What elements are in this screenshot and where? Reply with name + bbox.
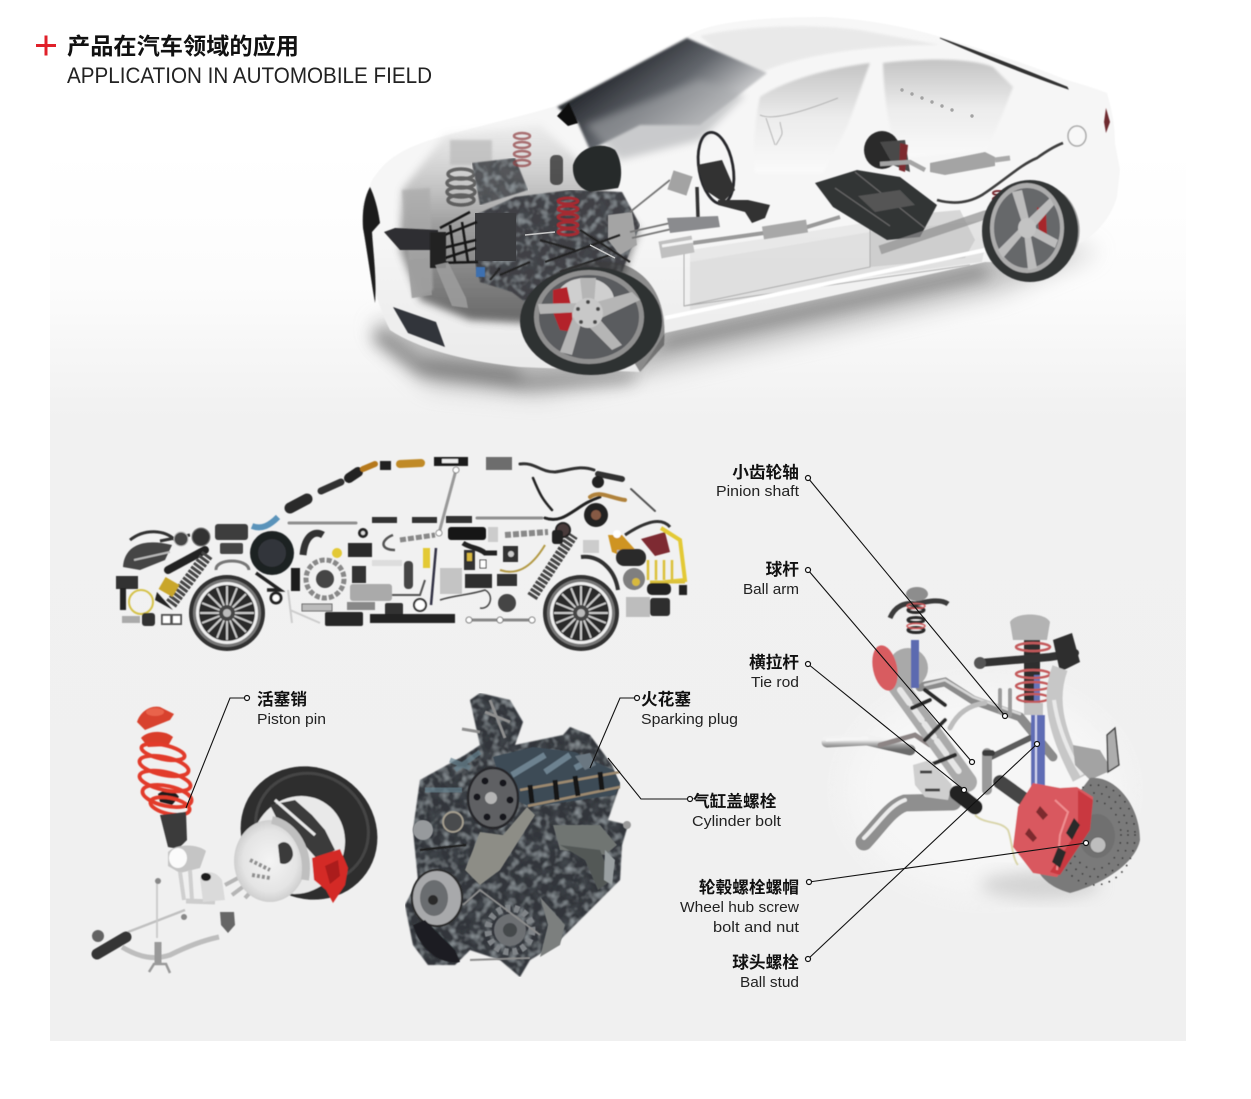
callout: piston pin (186, 689, 326, 808)
car made of parts (116, 457, 687, 651)
dark suspension parts behind rim (270, 800, 335, 860)
windshield (557, 38, 767, 150)
knuckle (1055, 668, 1080, 778)
leader end dot (1084, 840, 1088, 846)
tyre (520, 267, 662, 375)
roof dark strip (940, 38, 1068, 89)
blue filter (476, 267, 485, 277)
callout: piston pin: Piston pin (257, 711, 326, 728)
label: 轮毂螺栓螺帽 (699, 877, 799, 897)
subframe tubes (827, 680, 1053, 842)
leader end dot (970, 760, 974, 764)
rear fuel pipe (937, 143, 1063, 202)
carburettor highlights (462, 700, 510, 738)
caliper (1037, 207, 1047, 237)
wheel and brake (214, 740, 404, 926)
brake lines to steering (630, 180, 676, 238)
label: 小齿轮轴 (732, 463, 799, 482)
rim interior (233, 779, 363, 911)
brake disc (234, 820, 306, 902)
callout: wheel hub screw bolt and nut (680, 840, 1088, 936)
steering boot (957, 793, 975, 807)
gearbox housing (913, 760, 952, 800)
lower control arm (92, 866, 262, 973)
blue highlights (425, 752, 480, 790)
radiator crossmember (384, 228, 438, 250)
leader dot (244, 696, 250, 700)
leader start dot (806, 880, 812, 884)
tyre (982, 180, 1078, 282)
hub (573, 298, 603, 328)
pale lower strut (408, 258, 468, 308)
strut and spring (137, 707, 206, 873)
callout: tie rod: Tie rod (751, 674, 799, 691)
icon: red plus (36, 36, 56, 56)
callout: pinion shaft (716, 463, 1008, 718)
oil pan (413, 920, 460, 962)
leader line (808, 744, 1037, 959)
faint red strut (514, 133, 530, 166)
upper engine box (472, 158, 528, 205)
selector box (667, 170, 693, 196)
intake coils (447, 169, 475, 205)
muffler (930, 152, 995, 175)
fog lamp (393, 307, 445, 347)
wheels (189, 575, 619, 651)
label: 气缸盖螺栓 (693, 791, 777, 811)
drilled brake disc (1035, 778, 1140, 893)
leader end dot (1034, 742, 1040, 746)
callout: wheel hub screw bolt and nut: Wheel hub screw (680, 899, 799, 916)
strut tower (608, 212, 637, 255)
label: 活塞销 (257, 689, 307, 709)
crank pulley (412, 870, 462, 926)
callout: cylinder bolt: Cylinder bolt (692, 813, 782, 830)
contact shadow under sill and bumper (372, 266, 990, 388)
callout: ball stud (732, 742, 1040, 991)
rear parts (532, 503, 687, 617)
caliper (312, 849, 348, 903)
roof and window parts (289, 457, 655, 536)
red spring (558, 198, 578, 235)
title Chinese: 产品在汽车领域的应用 (67, 33, 299, 59)
callout: sparking plug: Sparking plug (641, 711, 738, 728)
leader line (808, 664, 964, 790)
timing pulley (468, 768, 518, 828)
exhaust pipe (693, 217, 840, 243)
middle parts (288, 527, 548, 626)
leader line (590, 698, 634, 768)
label: 火花塞 (641, 689, 691, 709)
grille (363, 187, 380, 303)
radiating frame struts (432, 212, 478, 263)
title English: APPLICATION IN AUTOMOBILE FIELD (67, 63, 432, 88)
door panel and sill (665, 210, 990, 318)
background panel (50, 150, 1186, 1041)
label: 球头螺栓 (732, 952, 799, 972)
rear brake disc (864, 131, 900, 169)
spokes (538, 278, 640, 355)
filler cap (1068, 126, 1086, 146)
tyre (214, 740, 404, 926)
cabin and underbody parts (660, 108, 1110, 250)
small dark cylinder (550, 155, 563, 185)
leader end dot (1002, 714, 1008, 718)
ground shadow (980, 871, 1100, 899)
engine block and accessories mass (475, 190, 640, 302)
timing belt cover (465, 807, 535, 885)
leader dot (688, 796, 692, 802)
brake caliper (1013, 783, 1093, 877)
hood corner (557, 103, 578, 126)
leader line (809, 843, 1086, 882)
hub (1018, 218, 1036, 238)
pipes bundle (490, 230, 630, 280)
idler (413, 820, 433, 840)
car body (362, 17, 1120, 372)
shifter plate (667, 216, 720, 233)
pale canister (450, 140, 492, 165)
dark lower frame (430, 232, 446, 268)
bay haze (400, 125, 640, 325)
right strut (974, 614, 1119, 787)
pale backdrop (845, 685, 1125, 895)
fuel tank (815, 170, 937, 240)
broad ground shadow (372, 240, 1100, 395)
front wheel (520, 262, 665, 375)
callout: sparking plug (590, 689, 738, 768)
transparent cutaway car (362, 17, 1120, 395)
label: 球杆 (766, 560, 799, 579)
pedal bracket (718, 200, 770, 223)
heading (36, 33, 432, 88)
muffler pipe (880, 162, 925, 170)
leader dot (634, 696, 640, 700)
callout: wheel hub screw bolt and nut: bolt and nut (713, 919, 800, 936)
leader end dot (962, 788, 966, 792)
outer bracket (1073, 745, 1112, 780)
front suspension with wheel (92, 707, 404, 973)
tensioner (443, 812, 463, 832)
rear side window (883, 60, 1013, 158)
callout: ball arm: Ball arm (743, 581, 799, 598)
leader line (608, 758, 687, 799)
main block (475, 213, 516, 261)
spokes (998, 190, 1058, 270)
left strut (868, 587, 948, 693)
brake hose (975, 815, 1018, 865)
leader start dot (806, 568, 810, 572)
block silhouette (405, 693, 628, 977)
callout: pinion shaft: Pinion shaft (716, 483, 800, 500)
callout: ball arm (743, 560, 974, 764)
front side window (754, 63, 870, 173)
brake disc (556, 278, 614, 322)
interior detail lines (760, 98, 838, 145)
leader line (808, 478, 1005, 716)
leader start dot (806, 476, 810, 480)
steering wheel (693, 130, 739, 206)
leader line (186, 698, 244, 808)
windshield lower fade (585, 80, 745, 160)
rear spring (993, 191, 1003, 207)
intake manifold (553, 825, 617, 855)
brake booster (573, 146, 621, 192)
engine (405, 693, 631, 977)
leader line (808, 570, 972, 762)
wheel arch shade (530, 262, 665, 372)
label: 横拉杆 (749, 652, 799, 672)
callout: ball stud: Ball stud (740, 974, 799, 991)
leader start dot (806, 662, 810, 666)
valve cover (493, 747, 620, 807)
leader start dot (806, 956, 810, 962)
rear axle subframe assembly (827, 587, 1140, 899)
oil filler (575, 753, 596, 770)
tail light (1104, 108, 1110, 133)
caliper (553, 287, 573, 332)
callout: cylinder bolt (608, 758, 782, 830)
front parts (116, 517, 323, 626)
far side roof shading (700, 26, 940, 78)
pale radiator bracket (402, 188, 433, 298)
rear wheel (982, 180, 1080, 282)
rim (990, 183, 1064, 273)
rear seat dots (900, 88, 974, 118)
hub (278, 842, 293, 864)
callout: tie rod (749, 652, 966, 792)
rim ring (534, 270, 644, 364)
alternator (488, 908, 532, 952)
wheel arch (990, 184, 1080, 275)
alternator belt (540, 897, 565, 957)
engine bay (384, 125, 676, 325)
